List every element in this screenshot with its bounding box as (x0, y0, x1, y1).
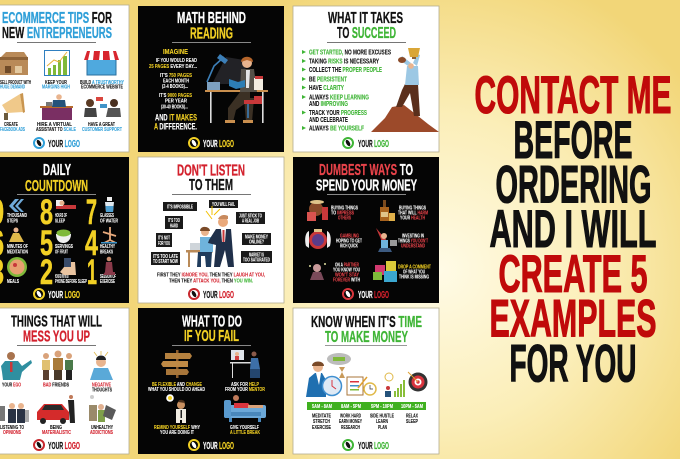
text: build website: ECOMMERCE WEBSITE (81, 84, 123, 90)
text: hire assistant: HIRE A VIRTUAL (37, 122, 72, 128)
labels: countdown: HEALTHY (100, 244, 115, 250)
speech bubbles: discouraging remarks: IT'S IMPOSSIBLE (167, 204, 193, 210)
text: money wasters: GAMBLING (340, 234, 359, 240)
text: margins (42, 80, 70, 90)
text: customer support: CUSTOMER SUPPORT (82, 127, 122, 133)
panel: don't listen to them (138, 157, 284, 303)
text: ask for help: FROM YOUR MENTOR (225, 387, 265, 393)
icon: man on mountain with trophy (371, 48, 439, 132)
logo: YOUR LOGO (48, 440, 80, 452)
heading: time to make money: TO MAKE MONEY (325, 329, 408, 346)
numbers: countdown: 8 (40, 193, 53, 232)
logo: YOUR LOGO (358, 289, 389, 301)
text: money wasters: YOU KNOW YOU (333, 268, 360, 274)
speech bubbles: discouraging remarks (151, 200, 272, 265)
labels: countdown: MEALS (7, 279, 19, 285)
schedule: time slots: RESEARCH (341, 425, 360, 431)
heading: daily countdown (17, 162, 96, 195)
list: keys to success (302, 48, 391, 133)
logo: YOUR LOGO (48, 289, 80, 301)
text: money wasters (331, 206, 431, 284)
schedule: time slots (307, 402, 426, 431)
labels: countdown: SERVINGS (55, 244, 73, 250)
labels: bad influences row 1 (2, 382, 112, 394)
text: money wasters: ON A PARTNER (335, 262, 359, 268)
labels: countdown: OF FRUIT (55, 250, 68, 256)
labels: countdown: PHONE BEFORE SLEEP (55, 279, 87, 285)
labels: bad influences row 2: BEING (50, 425, 62, 431)
heading: math behind reading: READING (190, 26, 233, 42)
panel: what to do if you fail (138, 308, 284, 454)
icons: bad influences row 2 (0, 395, 116, 424)
list: keys to success: GET STARTED, NO MORE EXCUSES (309, 48, 391, 57)
text: margins: KEEP YOUR (45, 80, 67, 86)
schedule: time slots: PLAN (378, 425, 387, 431)
icon: boss and employee (186, 206, 234, 267)
labels: countdown: THOUSAND (7, 213, 27, 219)
list: keys to success: HAVE CLARITY (309, 83, 344, 92)
heading: dumbest ways (316, 162, 417, 195)
numbers: countdown: 4 (85, 224, 98, 263)
labels: bad influences row 2: MATERIALISTIC (42, 430, 71, 436)
labels: bad influences row 2: OPINIONS (3, 430, 21, 436)
labels: countdown: STEPS (7, 218, 18, 224)
schedule: time slots: SIDE HUSTLE (370, 414, 394, 420)
text: money wasters: RICH QUICK (340, 244, 358, 250)
icon: mentor video call (230, 350, 260, 378)
icon: warehouse (0, 52, 28, 75)
logo (189, 289, 234, 301)
icon: assistant at desk (40, 94, 73, 120)
schedule: time slots: MEDITATE (312, 414, 331, 420)
heading: math behind reading (172, 10, 251, 43)
logo: YOUR LOGO (358, 440, 389, 452)
icons: daily habits (7, 197, 117, 277)
heading: mess you up: MESS YOU UP (23, 328, 90, 346)
logo (343, 138, 389, 150)
text: imagine reading: EACH MONTH (163, 78, 189, 84)
text: little break: A LITTLE BREAK (230, 430, 260, 436)
text: money wasters: DROP A COMMENT (398, 264, 431, 270)
logo (343, 289, 389, 301)
text: imagine reading: IT'S 9000 PAGES (159, 93, 192, 99)
text: imagine reading (149, 47, 197, 132)
numbers: countdown (0, 193, 98, 292)
panel: things that will mess you up (0, 308, 129, 454)
logo: YOUR LOGO (203, 440, 234, 452)
schedule: time slots: EARN MONEY (339, 419, 362, 425)
speech bubbles: discouraging remarks: FOR YOU (158, 241, 170, 247)
schedule: time slots: RELAX (406, 414, 418, 420)
labels: countdown: MEDITATION (7, 250, 28, 256)
heading: ecommerce tips: ECOMMERCE TIPS FOR (2, 10, 112, 27)
logo: YOUR LOGO (203, 138, 234, 150)
numbers: countdown: 7 (86, 193, 97, 232)
text: money wasters: YOUR HEALTH (400, 216, 425, 222)
labels: countdown: BREAKS (100, 250, 113, 256)
text: build website: BUILD A TRUSTWORTHY (80, 80, 124, 86)
heading: math behind reading: MATH BEHIND (177, 10, 246, 27)
speech bubbles: discouraging remarks: YOU WILL FAIL (212, 202, 235, 208)
labels: bad influences row 1: YOUR EGO (2, 382, 21, 388)
text: imagine reading: PER YEAR (165, 98, 187, 104)
schedule: time slots: WORK HARD (340, 414, 361, 420)
text: create ads (0, 122, 25, 133)
panel: math behind reading (138, 6, 284, 152)
icon: megaphone (2, 93, 25, 120)
text: money wasters: WON'T STAY (335, 272, 359, 278)
heading: what to do: IF YOU FAIL (184, 328, 239, 345)
panel: daily countdown (0, 157, 129, 303)
heading: time to make money (311, 314, 422, 346)
text: imagine reading: A DIFFERENCE. (154, 122, 197, 132)
speech bubbles: discouraging remarks: MAKE MONEY (245, 234, 268, 240)
text: imagine reading: AND IT MAKES (155, 112, 197, 124)
labels: bad influences row 2: UNHEALTHY (91, 425, 113, 431)
speech bubbles: discouraging remarks: MARKET IS (249, 252, 264, 258)
text: ask for help (225, 382, 265, 393)
list: keys to success: AND IMPROVING (309, 99, 348, 108)
labels: countdown: EXERCISE (100, 279, 115, 285)
labels: countdown: SLEEP (55, 218, 65, 224)
speech bubbles: discouraging remarks: ONLINE? (249, 240, 264, 246)
text: little break: GIVE YOURSELF (230, 425, 259, 431)
icon: signpost (161, 350, 192, 378)
text: first they ignore you: FIRST THEY IGNORE YOU, THEN THEY LAUGH AT YOU, (157, 272, 265, 278)
list: keys to success: AND CELEBRATE (309, 115, 348, 124)
icon: support agents (84, 97, 121, 117)
heading: ecommerce tips: NEW ENTREPRENEURS (2, 25, 112, 42)
speech bubbles: discouraging remarks: TO START NOW (153, 259, 178, 265)
schedule: time slots: 8AM - 5PM (341, 404, 361, 410)
schedule: time slots: STRETCH (313, 419, 330, 425)
icon: lightbulb and man (166, 394, 186, 423)
labels: countdown: SESSION OF (100, 274, 116, 280)
text: create ads: FACEBOOK ADS (0, 127, 25, 133)
panel: dumbest ways (293, 157, 439, 303)
heading: mess you up: THINGS THAT WILL (11, 314, 102, 330)
schedule: time slots: EXERCISE (312, 425, 331, 431)
text: imagine reading: IF YOU WOULD READ (156, 58, 197, 64)
text: money wasters: FOREVER WITH (333, 278, 360, 284)
heading: daily countdown: COUNTDOWN (25, 178, 88, 195)
labels: bad influences row 1: THOUGHTS (92, 388, 112, 394)
text: money wasters: THAT WILL HARM (398, 210, 428, 216)
text: imagine reading: 25 PAGES EVERY DAY... (149, 64, 197, 70)
labels: bad influences row 2: ADDICTIONS (90, 430, 113, 436)
text: money wasters: UNDERSTAND (401, 244, 425, 250)
labels: bad influences row 1: NEGATIVE (92, 382, 111, 388)
logo: YOUR LOGO (203, 289, 234, 301)
heading: time to make money: KNOW WHEN IT'S TIME (311, 314, 422, 331)
panel: what it takes to succeed (293, 6, 439, 152)
heading: what it takes (327, 10, 406, 43)
heading: what it takes: TO SUCCEED (337, 25, 396, 42)
text: money wasters: TO IMPRESS (331, 210, 354, 216)
text: ask for help: ASK FOR HELP (231, 382, 259, 388)
text: customer support (82, 122, 122, 133)
heading: dumbest ways: SPEND YOUR MONEY (316, 178, 417, 194)
text: first they ignore you (157, 272, 265, 284)
text: money wasters: OF WHAT YOU (403, 270, 425, 276)
text: margins: MARGINS HIGH (42, 84, 70, 90)
text: build website (80, 80, 124, 90)
logo (189, 138, 234, 150)
logo (189, 440, 234, 452)
speech bubbles: discouraging remarks: IT'S NOT (158, 236, 170, 242)
logo (34, 289, 80, 301)
text: sell product (0, 80, 31, 90)
icon: man reading at desk (205, 54, 268, 123)
schedule: time slots: 5PM - 10PM (371, 404, 393, 410)
text: first they ignore you: THEN THEY ATTACK YOU, THEN YOU WIN. (169, 278, 253, 284)
labels: bad influences row 2: LISTENING TO (0, 425, 24, 431)
panel: ecommerce tips (0, 5, 129, 152)
schedule: time slots: SLEEP (406, 419, 418, 425)
text: hire assistant: ASSISTANT TO SCALE (36, 127, 76, 133)
heading: what to do: WHAT TO DO (182, 314, 242, 330)
text: money wasters: HOPING TO GET (336, 238, 362, 244)
icons: bad influences row 1 (1, 350, 113, 380)
list: keys to success: COLLECT THE PROPER PEOPLE (309, 65, 382, 74)
text: money wasters: THINGS YOU DON'T (398, 238, 428, 244)
schedule: time slots: 5AM - 8AM (312, 404, 332, 410)
speech bubbles: discouraging remarks: IT'S TOO (168, 218, 180, 224)
speech bubbles: discouraging remarks: HARD (170, 224, 178, 230)
text: remind yourself: YOU ARE DOING IT (160, 430, 194, 436)
heading: daily countdown: DAILY (43, 162, 71, 179)
text: remind yourself (154, 425, 200, 436)
speech bubbles: discouraging remarks: TOO SATURATED (243, 258, 270, 264)
text: money wasters: THINK IS MISSING (399, 274, 429, 280)
logo: YOUR LOGO (358, 138, 389, 150)
logo: YOUR LOGO (48, 138, 80, 150)
numbers: countdown: 2 (40, 253, 53, 292)
text: create ads: CREATE (4, 122, 18, 128)
icon: time management illustration (306, 353, 428, 397)
heading: dumbest ways: DUMBEST WAYS TO (319, 162, 413, 179)
icon: relaxing on sofa (224, 395, 266, 422)
numbers: countdown: 5 (40, 224, 53, 263)
speech bubbles: discouraging remarks: A REAL JOB (242, 218, 259, 224)
icons: money wasters (305, 200, 397, 282)
logo (34, 138, 80, 150)
heading: don't listen: DON'T LISTEN (177, 162, 245, 180)
text: imagine reading: IMAGINE (163, 47, 188, 56)
text: remind yourself: REMIND YOURSELF WHY (154, 425, 200, 431)
text: imagine reading: IT'S 750 PAGES (160, 73, 192, 79)
labels: bad influences row 2 (0, 425, 113, 436)
list: keys to success: BE PERSISTENT (309, 75, 347, 84)
logo (343, 440, 389, 452)
icon: margin chart (44, 50, 70, 76)
schedule: time slots: LEARN (376, 419, 388, 425)
list: keys to success: ALWAYS KEEP LEARNING (309, 92, 369, 102)
schedule: time slots: 10PM - 5AM (401, 404, 423, 410)
labels: countdown: MINUTES OF (7, 244, 28, 250)
labels: countdown (7, 213, 118, 285)
callout: contact me text (474, 66, 672, 394)
text: be flexible (148, 382, 205, 393)
speech bubbles: discouraging remarks: JUST STICK TO (239, 214, 262, 220)
heading: mess you up (11, 314, 102, 346)
text: be flexible: BE FLEXIBLE AND CHANGE (152, 382, 202, 388)
numbers: countdown: 1 (87, 253, 97, 292)
labels: countdown: HOURS WITHOUT (55, 274, 69, 280)
text: money wasters: INVESTING IN (402, 234, 424, 240)
labels: bad influences row 1: BAD FRIENDS (43, 382, 69, 388)
heading: what to do (172, 314, 251, 346)
text: sell product: SELL PRODUCT WITH (0, 80, 31, 86)
labels: countdown: GLASSES (100, 213, 114, 219)
heading: don't listen: TO THEM (189, 177, 233, 194)
text: be flexible: WHAT YOU SHOULD DO AHEAD (148, 387, 205, 393)
text: money wasters: OTHERS (338, 216, 351, 222)
labels: countdown: HOURS OF (55, 213, 67, 219)
text: sell product: HUGE DEMAND (0, 84, 25, 90)
logo (34, 440, 80, 452)
list: keys to success: ALWAYS BE YOURSELF (309, 124, 364, 133)
text: money wasters: BUYING THINGS (399, 206, 426, 212)
labels: countdown: OF WATER (100, 218, 118, 224)
heading: what it takes: WHAT IT TAKES (328, 10, 403, 27)
speech bubbles: discouraging remarks: IT'S TOO LATE (153, 254, 178, 260)
panel: know when it's time (293, 308, 439, 454)
text: imagine reading: (2-4 BOOKS)... (162, 84, 188, 90)
text: imagine reading: (30-40 BOOKS)... (161, 104, 188, 110)
icon: shop (84, 51, 119, 75)
text: customer support: HAVE A GREAT (88, 122, 115, 128)
text: money wasters: BUYING THINGS (331, 206, 358, 212)
list: keys to success: TAKING RISKS IS NECESSARY (309, 57, 379, 66)
text: little break (230, 425, 260, 436)
heading: ecommerce tips (2, 10, 112, 43)
list: keys to success: TRACK YOUR PROGRESS (309, 108, 367, 117)
text: hire assistant (36, 122, 76, 133)
heading: don't listen (172, 162, 251, 195)
